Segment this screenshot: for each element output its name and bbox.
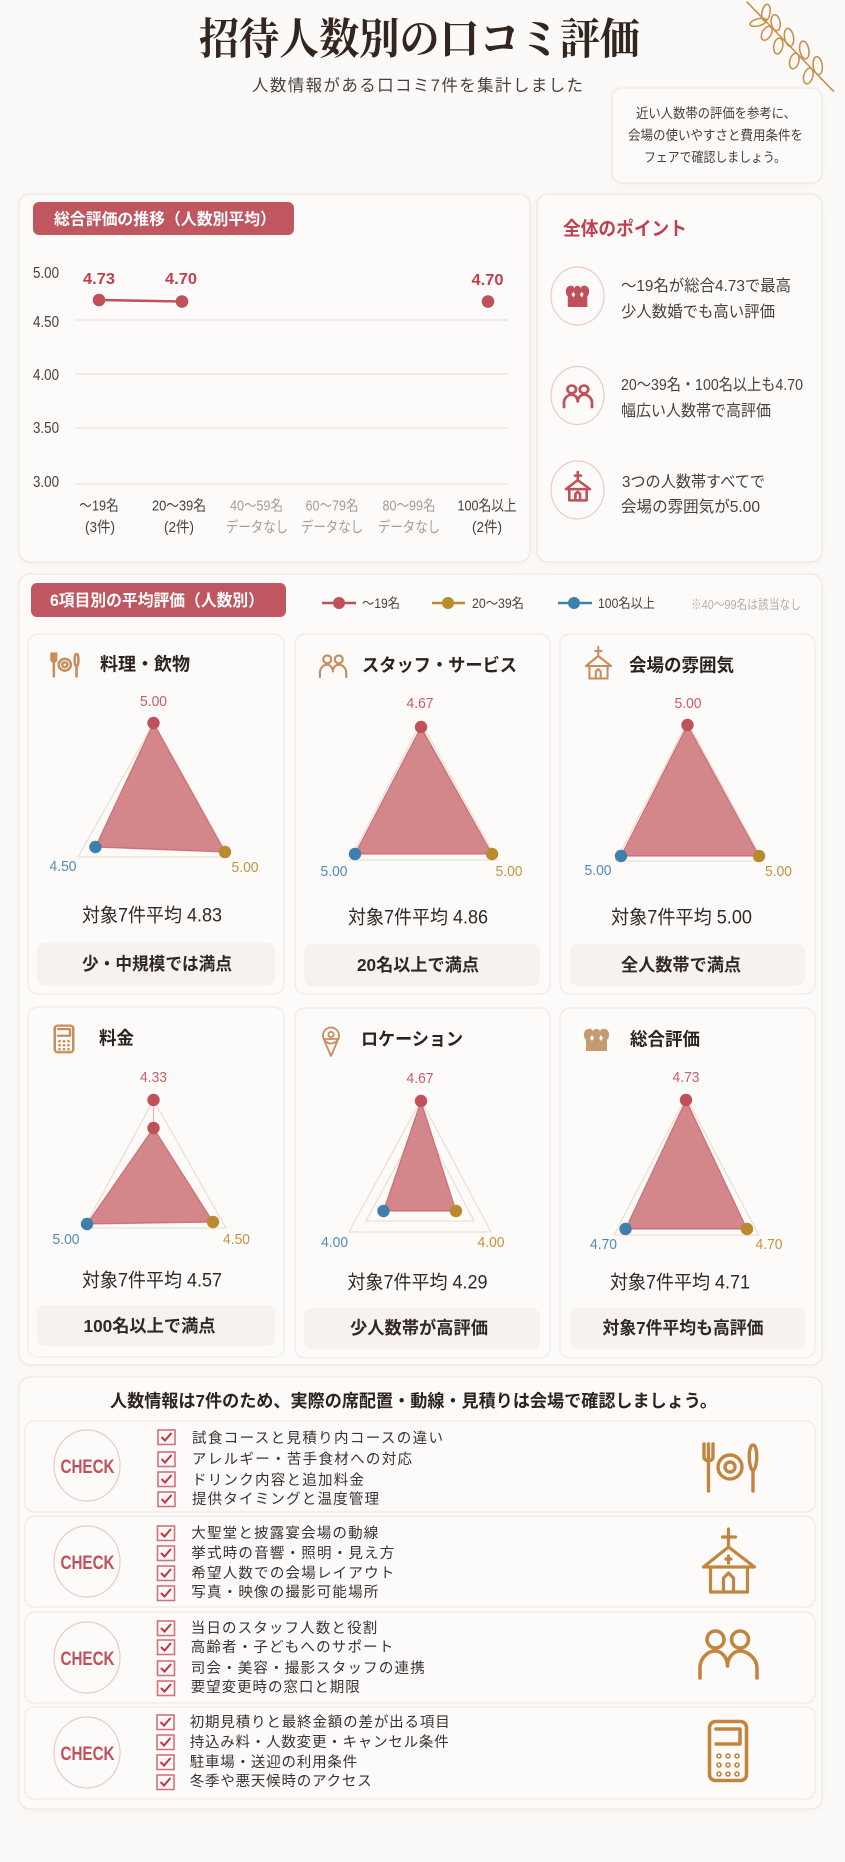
summary pill <box>37 1305 275 1346</box>
radar chart: 5.00 <box>140 693 167 710</box>
x axis labels: 〜19名 <box>79 498 119 514</box>
x axis labels: 80〜99名 <box>382 498 436 514</box>
x axis labels: データなし <box>226 518 288 536</box>
radar chart <box>590 1069 782 1253</box>
callout: note box: 近い人数帯の評価を参考に、 <box>636 106 796 121</box>
radar chart: 5.00 <box>674 695 702 712</box>
heading badge: overall trend: 総合評価の推移（人数別平均） <box>54 210 276 228</box>
heading badge: six categories <box>31 583 286 617</box>
x axis labels: データなし <box>378 518 440 536</box>
card: venue atmosphere: 対象7件平均 5.00 <box>611 906 752 928</box>
point 3: 3つの人数帯すべてで <box>622 473 765 491</box>
radar chart: 4.73 <box>672 1069 700 1086</box>
x axis labels: (3件) <box>85 519 115 536</box>
summary pill: 少人数帯が高評価 <box>350 1318 488 1338</box>
check items: 挙式時の音響・照明・見え方 <box>191 1545 394 1562</box>
y axis labels: 5.00 <box>33 265 59 282</box>
check items <box>158 1430 443 1508</box>
callout: note box <box>612 88 822 183</box>
icon: decorative branch <box>747 2 834 92</box>
panel: checklist <box>19 1377 822 1809</box>
check items: 持込み料・人数変更・キャンセル条件 <box>190 1734 449 1751</box>
card: overall rating: 総合評価 <box>630 1030 700 1050</box>
check items: 当日のスタッフ人数と役割 <box>191 1620 377 1637</box>
check badge <box>54 1430 120 1501</box>
radar chart: 5.00 <box>52 1231 80 1248</box>
checklist row: price <box>25 1707 815 1799</box>
x axis labels: (2件) <box>472 519 502 536</box>
radar chart: 5.00 <box>320 863 348 880</box>
point 3 <box>551 461 765 519</box>
check items <box>158 1620 425 1696</box>
check items: 司会・美容・撮影スタッフの連携 <box>191 1660 425 1677</box>
check items: アレルギー・苦手食材への対応 <box>192 1451 412 1468</box>
value labels: 4.70 <box>165 271 197 288</box>
checklist row: staff <box>25 1612 815 1703</box>
value labels: 4.73 <box>83 271 115 288</box>
heading badge: overall trend <box>33 202 294 235</box>
check items <box>158 1525 394 1601</box>
summary pill: 少・中規模では満点 <box>82 954 232 974</box>
summary pill <box>37 943 275 985</box>
radar chart: 4.50 <box>223 1231 250 1248</box>
icon: people <box>320 655 346 677</box>
check badge: CHECK <box>60 1649 115 1670</box>
point 3: 会場の雰囲気が5.00 <box>621 498 760 516</box>
radar chart: 4.70 <box>590 1236 617 1253</box>
summary pill: 20名以上で満点 <box>357 955 479 975</box>
card: food and drink: 対象7件平均 4.83 <box>82 904 222 926</box>
check items: ドリンク内容と追加料金 <box>192 1472 364 1489</box>
check items: 試食コースと見積り内コースの違い <box>192 1430 443 1447</box>
card: food and drink <box>28 634 284 994</box>
radar chart <box>321 1070 504 1251</box>
check badge: CHECK <box>60 1553 115 1574</box>
icon: church <box>586 647 611 678</box>
check items: 希望人数での会場レイアウト <box>191 1565 394 1582</box>
panel: overall points <box>537 194 822 562</box>
radar chart: 4.70 <box>756 1236 782 1253</box>
y axis labels: 4.00 <box>33 367 59 384</box>
checklist row: venue <box>25 1516 815 1607</box>
radar chart: 4.67 <box>406 1070 434 1087</box>
callout: note box: 会場の使いやすさと費用条件を <box>628 127 803 143</box>
icon: church large <box>704 1529 754 1592</box>
x axis labels: 100名以上 <box>458 498 516 514</box>
summary pill: 対象7件平均も高評価 <box>602 1318 764 1338</box>
icon: calculator large <box>710 1722 746 1780</box>
x axis labels: 60〜79名 <box>306 498 358 514</box>
radar chart: 5.00 <box>765 863 792 880</box>
card: overall rating: 対象7件平均 4.71 <box>610 1272 750 1294</box>
panel: overall trend line chart <box>19 194 530 562</box>
check items: 写真・映像の撮影可能場所 <box>191 1584 378 1601</box>
legend: 100名以上 <box>598 596 655 611</box>
summary pill <box>304 1308 540 1349</box>
card: staff service: スタッフ・サービス <box>362 654 517 676</box>
x axis labels: (2件) <box>164 519 194 536</box>
callout: note box: フェアで確認しましょう。 <box>644 150 786 165</box>
heading: checklist: 人数情報は7件のため、実際の席配置・動線・見積りは会場で確認しましょう。 <box>110 1391 717 1411</box>
icon: utensils <box>52 653 78 677</box>
legend: ※40〜99名は該当なし <box>691 597 801 612</box>
point 2 <box>551 366 803 424</box>
card: price: 料金 <box>99 1028 134 1048</box>
check items: 大聖堂と披露宴会場の動線 <box>191 1525 379 1542</box>
card: staff service <box>295 634 550 994</box>
legend <box>322 596 801 612</box>
radar chart: 4.33 <box>140 1069 167 1086</box>
summary pill <box>570 944 805 986</box>
check badge: CHECK <box>60 1457 115 1478</box>
icon: crown <box>584 1029 609 1051</box>
point 1: 少人数婚でも高い評価 <box>621 303 775 321</box>
legend: 〜19名 <box>362 596 400 611</box>
radar chart: 5.00 <box>232 859 258 876</box>
radar chart <box>50 693 258 876</box>
heading: overall points: 全体のポイント <box>563 217 687 240</box>
panel: six category radar charts <box>19 574 822 1365</box>
check badge <box>54 1717 120 1788</box>
check items: 冬季や悪天候時のアクセス <box>190 1773 372 1790</box>
y axis labels <box>33 265 59 491</box>
check badge <box>54 1622 120 1693</box>
check items: 提供タイミングと温度管理 <box>192 1490 380 1508</box>
point 2: 幅広い人数帯で高評価 <box>621 402 771 420</box>
heading badge: six categories: 6項目別の平均評価（人数別） <box>50 591 264 610</box>
value labels: 4.70 <box>472 272 504 289</box>
card: price: 対象7件平均 4.57 <box>82 1270 222 1292</box>
line series with points <box>93 294 494 308</box>
x axis labels: 20〜39名 <box>152 498 206 514</box>
y axis labels: 3.00 <box>33 474 59 491</box>
card: venue atmosphere <box>560 634 815 994</box>
card: staff service: 対象7件平均 4.86 <box>348 906 488 928</box>
icon: people large <box>700 1631 757 1678</box>
value labels <box>83 271 504 289</box>
radar chart: 4.67 <box>406 695 434 712</box>
point 1: 〜19名が総合4.73で最高 <box>621 277 791 295</box>
radar chart: 4.00 <box>478 1234 504 1251</box>
point 2: 20〜39名・100名以上も4.70 <box>621 376 803 394</box>
summary pill: 全人数帯で満点 <box>621 955 741 975</box>
check badge: CHECK <box>60 1744 115 1765</box>
card: food and drink: 料理・飲物 <box>100 654 190 674</box>
summary pill: 100名以上で満点 <box>84 1316 216 1336</box>
radar chart <box>584 695 792 880</box>
summary pill <box>570 1308 805 1349</box>
y axis labels: 3.50 <box>33 420 59 437</box>
radar chart <box>320 695 522 880</box>
radar chart <box>52 1069 250 1248</box>
card: location: 対象7件平均 4.29 <box>348 1272 488 1294</box>
radar chart: 5.00 <box>496 863 522 880</box>
radar chart: 5.00 <box>584 862 612 879</box>
check items: 高齢者・子どもへのサポート <box>191 1639 393 1656</box>
check items <box>157 1714 450 1790</box>
icon: calculator <box>55 1026 73 1052</box>
legend: 20〜39名 <box>472 596 524 611</box>
card: overall rating <box>560 1008 815 1358</box>
icon: map pin <box>323 1028 339 1056</box>
subtitle: 人数情報がある口コミ7件を集計しました <box>252 76 583 95</box>
radar chart: 4.50 <box>50 858 76 875</box>
point 1 <box>551 267 791 325</box>
check items: 初期見積りと最終金額の差が出る項目 <box>190 1714 450 1731</box>
y axis labels: 4.50 <box>33 314 59 331</box>
check items: 駐車場・送迎の利用条件 <box>190 1754 357 1771</box>
card: location <box>295 1008 550 1358</box>
check badge <box>54 1526 120 1597</box>
summary pill <box>304 944 540 986</box>
checklist row: food <box>25 1421 815 1512</box>
x axis labels <box>79 498 516 536</box>
card: location: ロケーション <box>361 1030 463 1050</box>
card: price <box>28 1007 284 1357</box>
x axis labels: 40〜59名 <box>230 498 283 514</box>
x axis labels: データなし <box>301 518 363 536</box>
check items: 要望変更時の窓口と期限 <box>191 1679 360 1696</box>
radar chart: 4.00 <box>321 1234 348 1251</box>
title: 招待人数別の口コミ評価 <box>199 16 640 64</box>
icon: utensils large <box>704 1444 757 1491</box>
card: venue atmosphere: 会場の雰囲気 <box>629 654 734 676</box>
